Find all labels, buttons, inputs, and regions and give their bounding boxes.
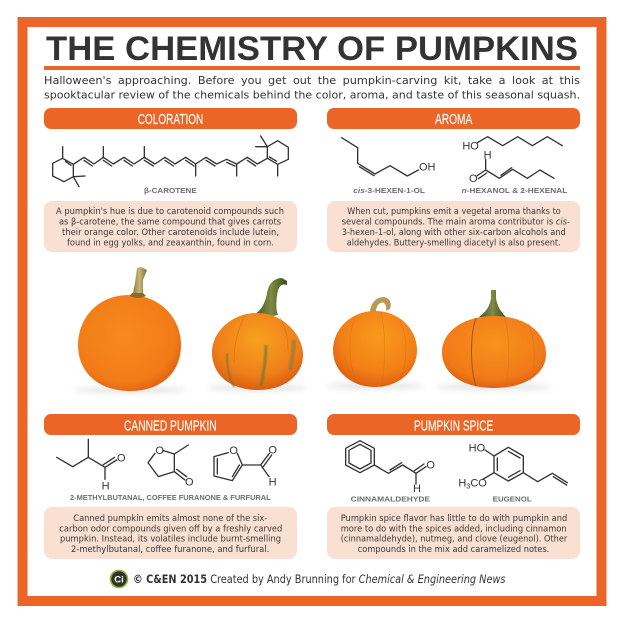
aroma header: AROMA — [435, 111, 472, 128]
pumpkin 2 — [212, 278, 303, 390]
canned pumpkin description: pumpkin. Instead, its volatiles include burnt-smelling — [60, 535, 281, 545]
molecules: canned pumpkin compounds: O — [268, 444, 277, 456]
molecules: canned pumpkin compounds: O — [185, 477, 194, 489]
molecule label: β-CAROTENE — [144, 186, 197, 195]
pumpkin spice header — [327, 414, 580, 435]
aroma description: 3-hexen-1-ol, along with other six-carbon alcohols and — [342, 228, 566, 238]
molecules: canned pumpkin compounds: H — [102, 480, 110, 492]
icon: CI logo — [110, 570, 128, 588]
pumpkin photos — [74, 267, 551, 392]
aroma description: aldehydes. Buttery-smelling diacetyl is also present. — [347, 238, 561, 248]
pumpkin spice description — [327, 507, 580, 559]
molecules: canned pumpkin compounds: O — [117, 453, 126, 465]
canned pumpkin description: Canned pumpkin emits almost none of the six- — [73, 514, 267, 524]
panel: canned pumpkin — [44, 414, 297, 559]
pumpkin spice description: Pumpkin spice flavor has little to do with pumpkin and — [341, 514, 567, 524]
aroma description: several compounds. The main aroma contributor is cis- — [342, 218, 570, 228]
molecules: aroma compounds — [342, 137, 562, 185]
pumpkin spice description: compounds in the mix add caramelized notes. — [358, 545, 549, 555]
footer credit: © C&EN 2015 Created by Andy Brunning for Chemical & Engineering News — [133, 572, 505, 586]
title underline — [44, 66, 580, 70]
molecules: spice compounds: O — [426, 460, 435, 472]
canned pumpkin description — [44, 507, 297, 559]
pumpkin spice header: PUMPKIN SPICE — [414, 418, 493, 434]
molecules: aroma compounds: HO — [462, 141, 479, 153]
aroma header — [327, 108, 580, 129]
panel: pumpkin spice: EUGENOL — [493, 494, 532, 504]
aroma description: When cut, pumpkins emit a vegetal aroma thanks to — [347, 207, 561, 217]
ground shadows — [74, 384, 551, 392]
intro text: spooktacular review of the chemicals behind the color, aroma, and taste of this seasonal squash. — [44, 88, 580, 102]
coloration description — [44, 201, 297, 252]
molecules: aroma compounds: O — [469, 173, 478, 185]
coloration header — [44, 108, 297, 129]
pumpkin spice description: more to do with the spices added, including cinnamon — [341, 524, 567, 534]
aroma description — [327, 201, 580, 252]
canned pumpkin header: CANNED PUMPKIN — [124, 418, 217, 434]
pumpkin 3 — [333, 297, 417, 387]
molecules: canned pumpkin compounds: O — [155, 445, 164, 457]
canned pumpkin description: carbon odor compounds given off by a freshly carved — [59, 524, 282, 534]
molecules: canned pumpkin compounds: H — [269, 477, 277, 489]
coloration description: as β-carotene, the same compound that gives carrots — [59, 218, 281, 228]
intro text: Halloween's approaching. Before you get out the pumpkin-carving kit, take a look at this — [44, 74, 580, 87]
coloration description: found in egg yolks, and zeaxanthin, found in corn. — [67, 238, 274, 248]
molecules: spice compounds: H — [413, 483, 421, 495]
panel: aroma — [327, 108, 580, 252]
panel: coloration — [44, 108, 297, 252]
pumpkin spice description: (cinnamaldehyde), nutmeg, and clove (eugenol). Other — [341, 535, 568, 545]
molecules: aroma compounds: H — [484, 150, 492, 162]
pumpkin 1 — [78, 267, 181, 391]
molecules: aroma compounds: OH — [419, 161, 436, 173]
molecules: canned pumpkin compounds: O — [229, 445, 238, 457]
molecule: beta-carotene — [53, 136, 288, 187]
canned pumpkin header — [44, 414, 297, 435]
intro text — [44, 74, 580, 102]
molecule labels: CINNAMALDEHYDE — [351, 494, 430, 504]
molecules: canned pumpkin compounds — [57, 439, 277, 492]
canned pumpkin description: 2-methylbutanal, coffee furanone, and furfural. — [71, 545, 269, 555]
panel: pumpkin spice — [327, 414, 580, 559]
molecules: spice compounds: CO — [470, 477, 487, 489]
molecules: spice compounds: HO — [469, 443, 486, 455]
pumpkin 4 — [442, 290, 546, 388]
coloration description: A pumpkin's hue is due to carotenoid compounds such — [56, 207, 284, 217]
coloration description: their orange color. Other carotenoids include lutein, — [62, 228, 279, 238]
molecules: spice compounds: 3 — [466, 481, 470, 490]
coloration header: COLORATION — [138, 111, 203, 128]
molecules: spice compounds — [346, 441, 567, 495]
title: THE CHEMISTRY OF PUMPKINS — [46, 30, 578, 68]
icon: CI logo: Ci — [114, 574, 124, 586]
molecules: spice compounds: H — [458, 477, 466, 489]
molecule label: 2-METHYLBUTANAL, COFFEE FURANONE & FURFURAL — [70, 493, 271, 502]
panel: aroma: n-HEXANOL & 2-HEXENAL — [462, 186, 568, 195]
molecule labels: cis-3-HEXEN-1-OL — [353, 186, 425, 195]
